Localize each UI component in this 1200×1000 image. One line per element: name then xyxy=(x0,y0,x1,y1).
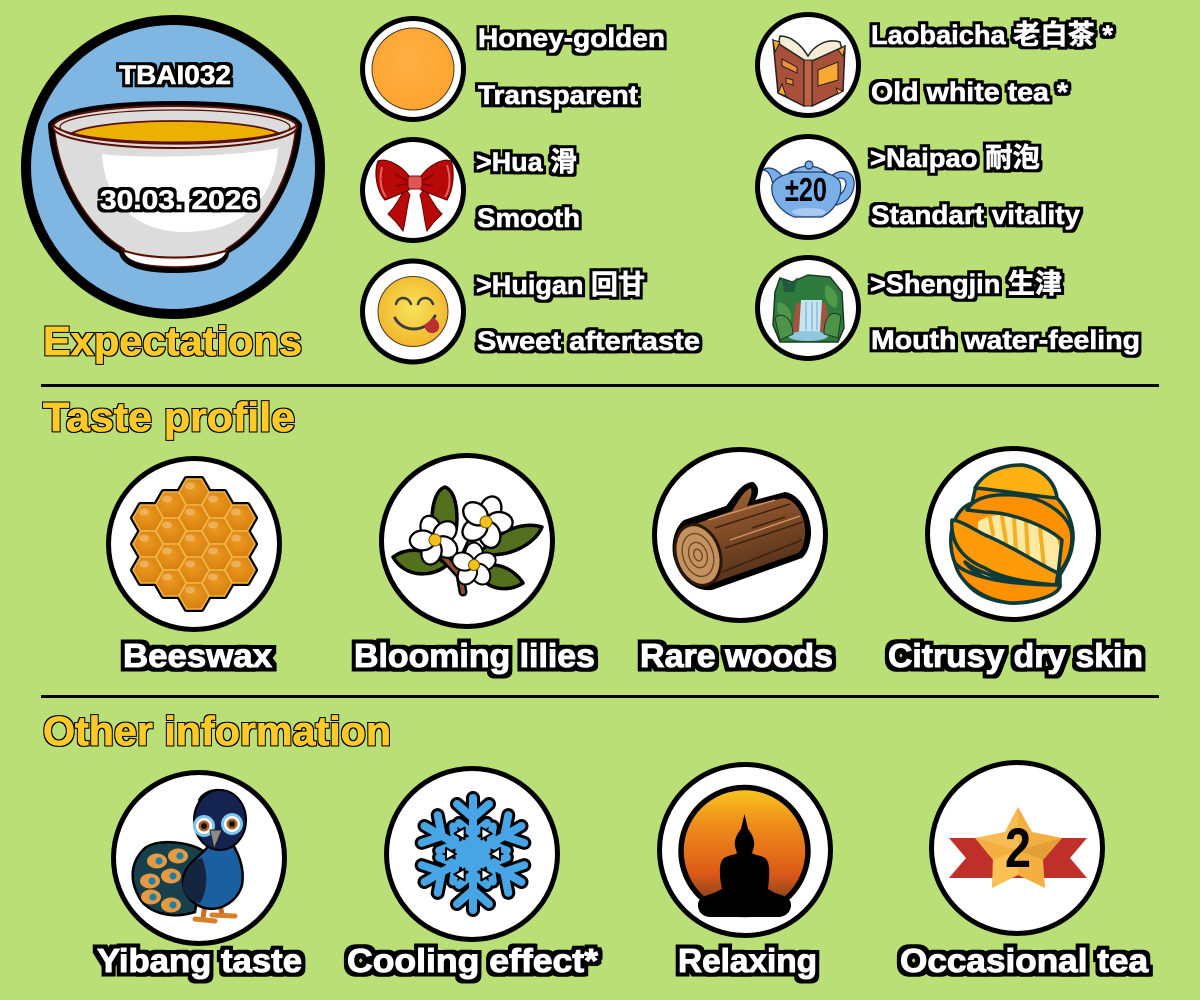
icon: blue teapot xyxy=(758,136,858,238)
label: rare woods: Rare woods xyxy=(640,637,833,674)
text: laobaicha: Laobaicha 老白茶 * xyxy=(871,20,1113,50)
text: hua: >Hua 滑 xyxy=(476,147,577,177)
icon: smiling face xyxy=(362,261,464,362)
text: smooth: Smooth xyxy=(477,203,580,233)
icon: old book xyxy=(758,14,858,116)
date: 30.03. 2026 xyxy=(100,185,258,215)
heading: taste profile: Taste profile xyxy=(43,394,295,440)
icon: star with ribbon, number 2 xyxy=(932,762,1102,934)
text: old white tea: Old white tea * xyxy=(871,77,1069,107)
icon: blue teapot: ±20 xyxy=(785,171,827,208)
label: blooming lilies: Blooming lilies xyxy=(354,637,595,674)
heading: other information: Other information xyxy=(43,708,391,754)
panel: taste profile xyxy=(43,394,1143,674)
label: occasional tea: Occasional tea xyxy=(900,942,1149,979)
text: naipao: >Naipao 耐泡 xyxy=(870,143,1040,173)
tea code: TBAI032 xyxy=(119,60,231,90)
icon: white blossoms xyxy=(382,456,552,626)
icon: tea bowl badge xyxy=(26,20,320,314)
text: huigan: >Huigan 回甘 xyxy=(476,270,645,300)
icon: meditating Buddha at sunset xyxy=(660,764,830,936)
text: sweet aftertaste: Sweet aftertaste xyxy=(477,326,700,356)
text: transparent: Transparent xyxy=(478,80,638,110)
icon: jungle waterfall xyxy=(758,258,858,358)
text: standart vitality: Standart vitality xyxy=(871,200,1080,230)
icon: wood log xyxy=(654,450,826,620)
heading: expectations: Expectations xyxy=(43,318,302,364)
icon: red bow xyxy=(362,140,464,240)
panel: expectations xyxy=(26,14,1140,364)
icon: peacock xyxy=(114,772,284,944)
label: cooling effect: Cooling effect* xyxy=(347,942,598,979)
label: citrusy dry skin: Citrusy dry skin xyxy=(888,637,1143,674)
icon: snowflake xyxy=(386,768,558,940)
panel: other information xyxy=(43,708,1149,979)
label: yibang taste: Yibang taste xyxy=(97,942,302,979)
label: beeswax: Beeswax xyxy=(123,637,273,674)
icon: honey colour swatch xyxy=(362,18,464,120)
icon: star with ribbon, number 2: 2 xyxy=(1005,816,1031,879)
text: honey-golden: Honey-golden xyxy=(478,23,665,53)
icon: spiral-peeled orange xyxy=(928,448,1098,620)
text: mouth water-feeling: Mouth water-feeling xyxy=(871,325,1140,355)
label: relaxing: Relaxing xyxy=(678,942,817,979)
text: shengjin: >Shengjin 生津 xyxy=(870,269,1062,299)
icon: honeycomb xyxy=(108,458,280,630)
